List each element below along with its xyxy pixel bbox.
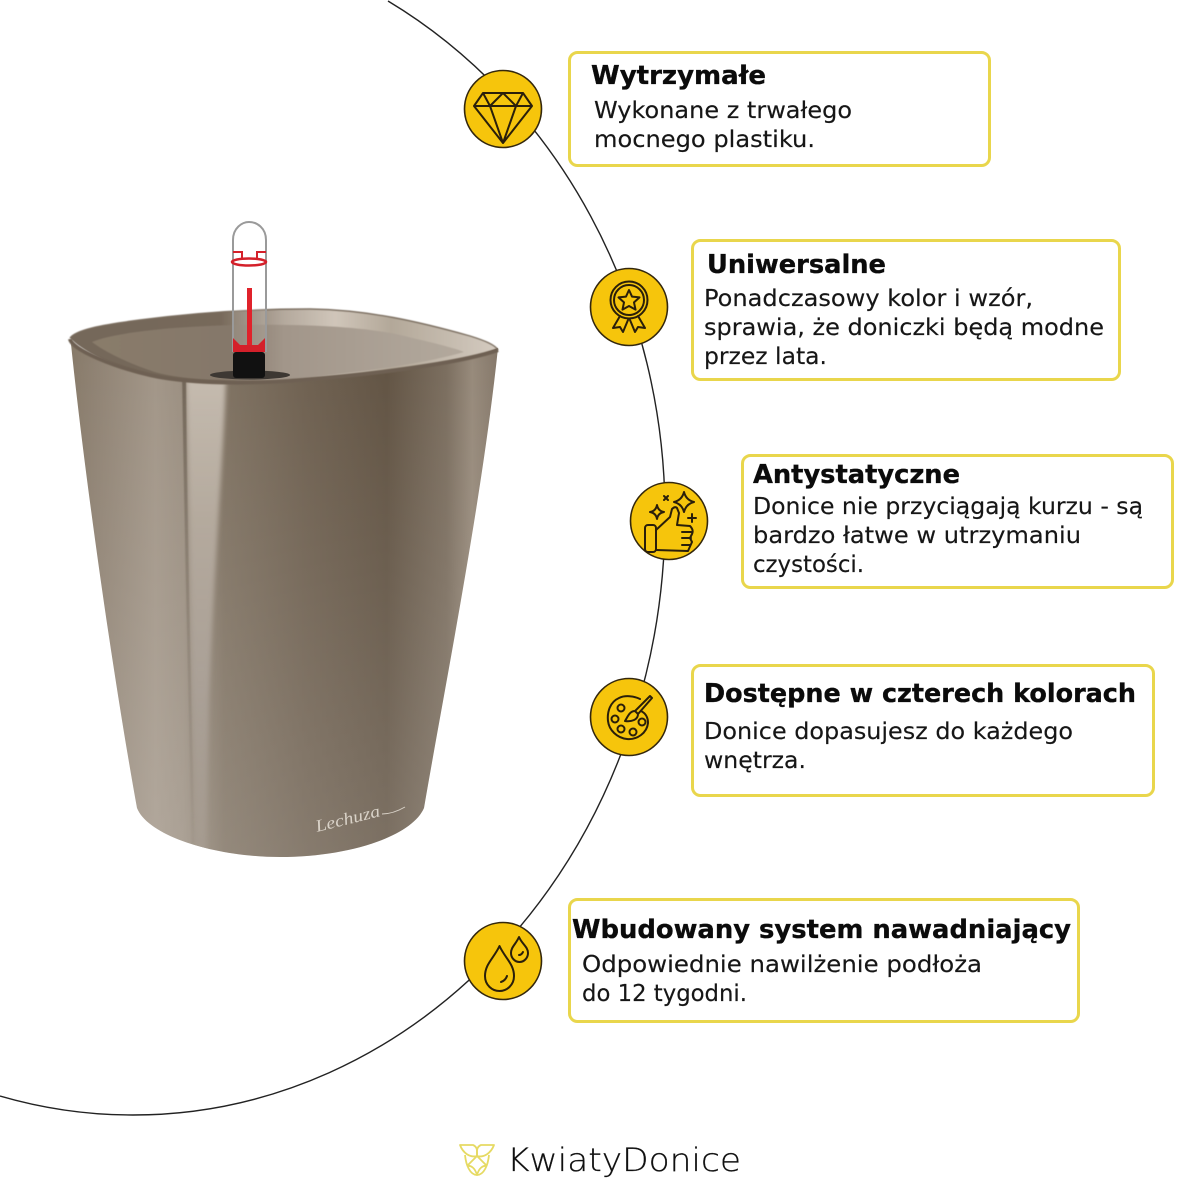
- card: Wytrzymałe: mocnego plastiku.: [594, 127, 815, 153]
- icon: diamond: [464, 70, 542, 148]
- card: Uniwersalne: sprawia, że doniczki będą modne: [704, 315, 1104, 341]
- brand name: KwiatyDonice: [507, 1141, 741, 1179]
- planter body: [60, 330, 510, 870]
- card: Wbudowany system nawadniający: Wbudowany system nawadniający: [572, 915, 1071, 945]
- icon: painter palette: [590, 678, 668, 756]
- feature 3: antistatic: [630, 456, 1172, 588]
- brand signature: [312, 801, 405, 836]
- water level indicator: [210, 222, 290, 380]
- card: Wbudowany system nawadniający: Odpowiednie nawilżenie podłoża: [582, 952, 982, 978]
- icon: butterfly logo: [460, 1145, 494, 1175]
- card: Wytrzymałe: Wykonane z trwałego: [594, 98, 852, 124]
- icon: medal: [590, 268, 668, 346]
- brand signature: Lechuza: [312, 801, 382, 836]
- footer logo: [460, 1141, 741, 1179]
- card: Antystatyczne: czystości.: [753, 552, 864, 578]
- card: Wytrzymałe: [570, 52, 990, 166]
- card: Uniwersalne: [692, 240, 1120, 380]
- card: Dostępne w czterech kolorach: [692, 666, 1154, 796]
- planter interior and rim: [70, 309, 498, 383]
- card: Dostępne w czterech kolorach: Dostępne w czterech kolorach: [704, 679, 1136, 709]
- card: Dostępne w czterech kolorach: wnętrza.: [704, 748, 806, 774]
- product: taupe self-watering planter: [60, 222, 510, 870]
- rim front edge: [70, 339, 498, 383]
- icon: thumbs up with sparkles: [630, 482, 708, 560]
- feature 1: durable: [464, 52, 990, 166]
- curved connector line: [0, 1, 665, 1115]
- feature 2: universal: [590, 240, 1120, 380]
- card: Dostępne w czterech kolorach: Donice dopasujesz do każdego: [704, 719, 1073, 745]
- feature 4: four colours: [590, 666, 1154, 796]
- card: Uniwersalne: Uniwersalne: [707, 250, 886, 280]
- card: Antystatyczne: Donice nie przyciągają kurzu - są: [753, 494, 1143, 520]
- icon: water drops: [464, 922, 542, 1000]
- card: Uniwersalne: Ponadczasowy kolor i wzór,: [704, 286, 1033, 312]
- card: Antystatyczne: bardzo łatwe w utrzymaniu: [753, 523, 1081, 549]
- card: Uniwersalne: przez lata.: [704, 344, 827, 370]
- card: Antystatyczne: [742, 456, 1172, 588]
- card: Wytrzymałe: Wytrzymałe: [591, 61, 766, 91]
- card: Wbudowany system nawadniający: [570, 900, 1078, 1022]
- feature 5: watering system: [464, 900, 1078, 1022]
- card: Antystatyczne: Antystatyczne: [753, 460, 960, 490]
- card: Wbudowany system nawadniający: do 12 tygodni.: [582, 981, 747, 1007]
